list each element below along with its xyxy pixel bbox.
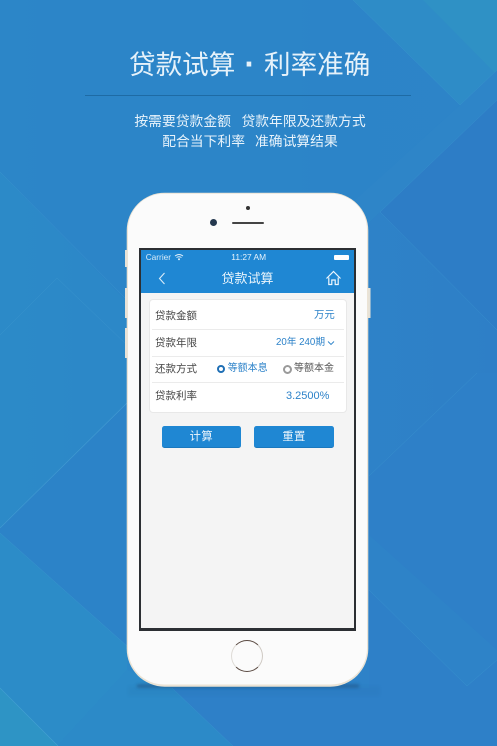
radio unselected [283, 365, 292, 374]
value: loan term: 20年 240期 [276, 337, 325, 348]
value: loan amount unit: 万元 [314, 310, 335, 321]
button: calculate [162, 426, 241, 448]
title divider [85, 95, 411, 96]
button: reset [254, 426, 334, 448]
speaker [232, 222, 264, 224]
title: · [244, 50, 254, 80]
option: equal installment: 等额本息 [228, 363, 268, 374]
icon: sensor [246, 206, 250, 210]
screen [139, 248, 356, 630]
status bar: carrier: Carrier [146, 252, 171, 262]
icon: home [326, 270, 341, 286]
value: interest rate: 3.2500% [286, 390, 329, 402]
icon: back arrow [158, 272, 165, 284]
phone body [125, 192, 370, 687]
row: loan amount: 贷款金额 [155, 310, 197, 322]
form card [148, 299, 347, 412]
app header [141, 250, 354, 292]
subtitle text: 按需要贷款金额 贷款年限及还款方式 [134, 114, 366, 129]
phone mockup [125, 192, 370, 687]
option: equal principal: 等额本金 [294, 363, 334, 374]
status bar: time: 11:27 AM [231, 252, 266, 262]
subtitle text: 配合当下利率 准确试算结果 [162, 134, 338, 149]
row: interest rate: 贷款利率 [155, 390, 197, 402]
button: reset: 重置 [282, 430, 306, 442]
button: calculate: 计算 [190, 430, 213, 442]
row: repayment method: 还款方式 [155, 363, 197, 375]
icon: wifi [174, 254, 184, 260]
title: 利率准确 [264, 50, 370, 80]
title: 贷款试算 [129, 50, 235, 80]
header title: 贷款试算 [222, 271, 274, 286]
subtitle text [134, 114, 366, 149]
icon: chevron [328, 341, 334, 345]
radio selected [217, 365, 225, 373]
row: loan term: 贷款年限 [155, 337, 197, 349]
home button [231, 640, 263, 672]
icon: camera [210, 219, 217, 226]
icon: battery [334, 255, 349, 260]
title [129, 50, 370, 80]
